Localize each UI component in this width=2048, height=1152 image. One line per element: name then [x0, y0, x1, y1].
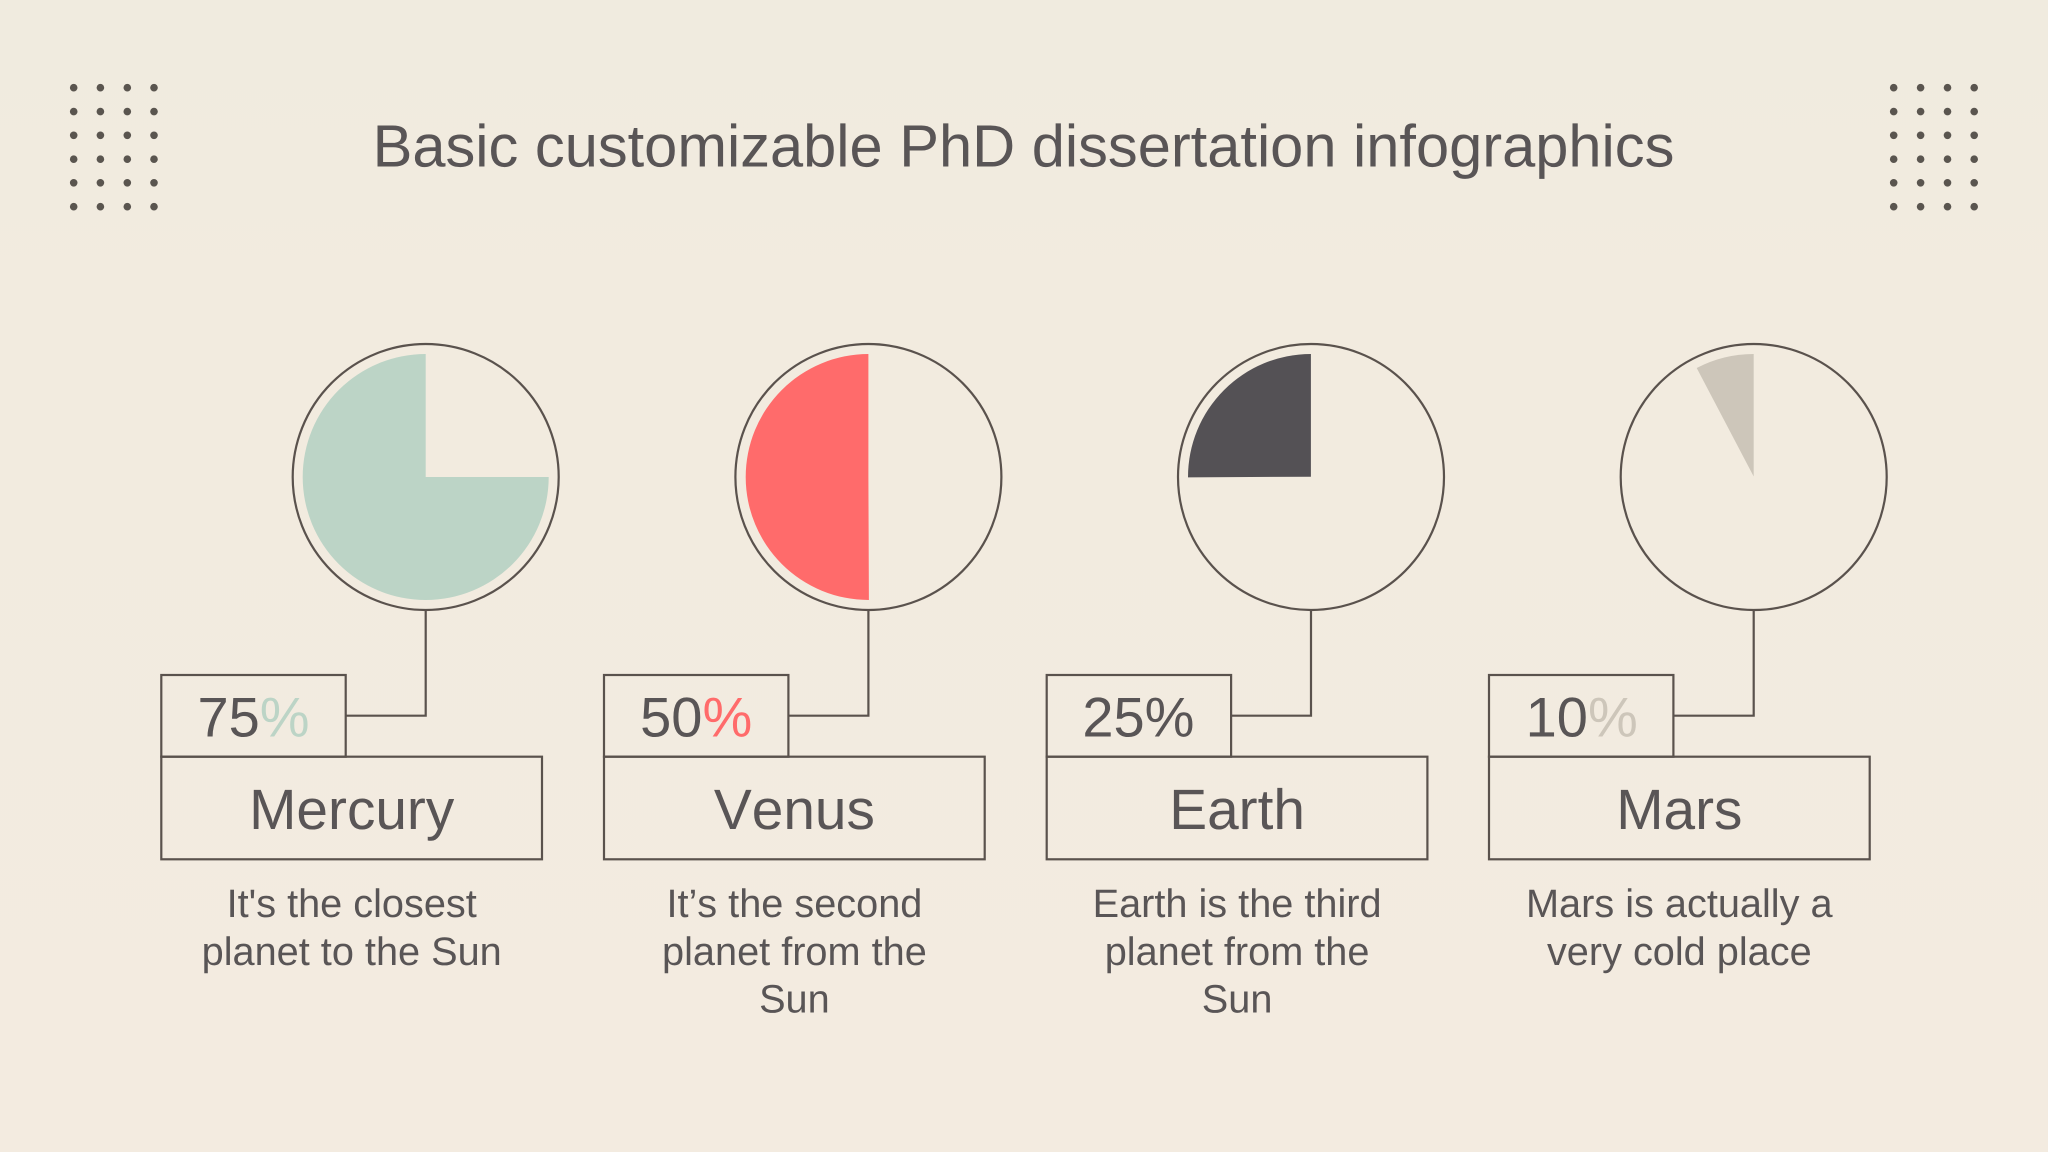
description: Earth: Earth is the third: [1093, 882, 1382, 926]
description: Mercury: It's the closest: [227, 882, 477, 926]
pie chart: Mercury 75%: [293, 344, 559, 610]
name box: Earth: [1047, 757, 1427, 859]
pie chart: Mars 10%: [1621, 344, 1887, 610]
description: Venus: planet from the: [662, 930, 927, 974]
percentage box: Mars: [1489, 675, 1673, 757]
panel: Earth: [1047, 344, 1444, 1022]
connector: Venus: [788, 610, 868, 716]
percentage box: Mercury: [161, 675, 346, 757]
percentage box: Earth: 25%: [1082, 686, 1194, 749]
description: Earth: Sun: [1202, 978, 1272, 1022]
panel: Mercury: [161, 344, 559, 974]
name box: Mercury: [161, 757, 542, 859]
connector: Earth: [1231, 610, 1311, 716]
percentage box: Venus: [604, 675, 788, 757]
description: Earth: planet from the: [1105, 930, 1369, 974]
description: Mercury: planet to the Sun: [202, 930, 502, 974]
connector: Mercury: [346, 610, 426, 716]
name box: Venus: Venus: [714, 779, 875, 842]
dot pattern: top left: [70, 84, 158, 210]
name box: Venus: [604, 757, 985, 859]
percentage box: Mars: 10%: [1526, 686, 1638, 749]
percentage box: Earth: [1047, 675, 1231, 757]
title: Basic customizable PhD dissertation infographics: [373, 112, 1674, 180]
name box: Mercury: Mercury: [249, 779, 455, 842]
description: Mars: very cold place: [1547, 930, 1812, 974]
description: Mars: Mars is actually a: [1526, 882, 1834, 926]
name box: Earth: Earth: [1169, 779, 1305, 842]
dot pattern: top right: [1890, 84, 1978, 210]
percentage box: Mercury: 75%: [197, 686, 310, 749]
percentage box: Venus: 50%: [640, 686, 752, 749]
panel: Mars: [1489, 344, 1887, 974]
name box: Mars: Mars: [1616, 779, 1742, 842]
panel: Venus: [604, 344, 1001, 1022]
description: Venus: Sun: [759, 978, 830, 1022]
name box: Mars: [1489, 757, 1870, 859]
description: Venus: It’s the second: [666, 882, 922, 926]
pie chart: Earth 25%: [1178, 344, 1444, 610]
pie chart: Venus 50%: [735, 344, 1001, 610]
connector: Mars: [1673, 610, 1754, 716]
